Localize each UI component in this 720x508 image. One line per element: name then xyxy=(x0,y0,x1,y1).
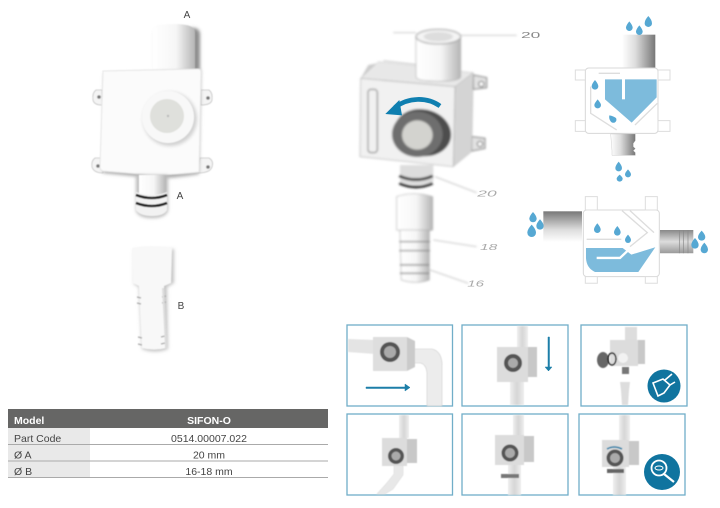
row: diameter A: 20 mm xyxy=(193,450,225,462)
panel: angled drain connection xyxy=(347,414,452,495)
callout: 18: 18 xyxy=(480,242,498,252)
arrow: right xyxy=(366,384,410,391)
product photo: hose adapter xyxy=(132,246,174,352)
arrow: down xyxy=(545,337,552,371)
cross-section diagram: vertical flow xyxy=(575,16,670,182)
callout: 16: 16 xyxy=(467,279,484,289)
row: diameter B xyxy=(14,466,233,478)
table header: Model: Model xyxy=(14,415,44,427)
label: B: B xyxy=(178,301,185,312)
row: diameter B: Ø B xyxy=(14,466,32,478)
panel: straight drain with clamp xyxy=(462,414,568,495)
callout: 20 middle: 20 xyxy=(475,189,497,199)
row: Part Code: Part Code xyxy=(14,433,61,445)
callout: 20 top: 20 xyxy=(521,30,541,40)
icon: hand and wrench badge xyxy=(648,370,680,402)
panel: vertical installation xyxy=(462,325,568,406)
exploded view diagram xyxy=(360,29,541,289)
panel: maintenance xyxy=(581,325,687,406)
icon: magnifier badge xyxy=(644,454,680,490)
label: A bottom: A xyxy=(177,191,184,202)
icon: rotation arrow xyxy=(385,99,440,115)
row: diameter A: Ø A xyxy=(14,450,32,462)
panel: inspection xyxy=(579,414,685,495)
table header: SIFON-O: SIFON-O xyxy=(187,415,231,427)
cross-section diagram: horizontal flow xyxy=(527,197,708,283)
product photo: siphon body xyxy=(92,24,213,218)
row: diameter A xyxy=(14,450,225,462)
row: Part Code xyxy=(14,433,247,445)
specification table xyxy=(8,409,328,478)
row: diameter B: 16-18 mm xyxy=(185,466,233,478)
panel: horizontal installation xyxy=(347,325,452,406)
row: Part Code: 0514.00007.022 xyxy=(171,433,247,445)
label: A top: A xyxy=(184,10,191,21)
